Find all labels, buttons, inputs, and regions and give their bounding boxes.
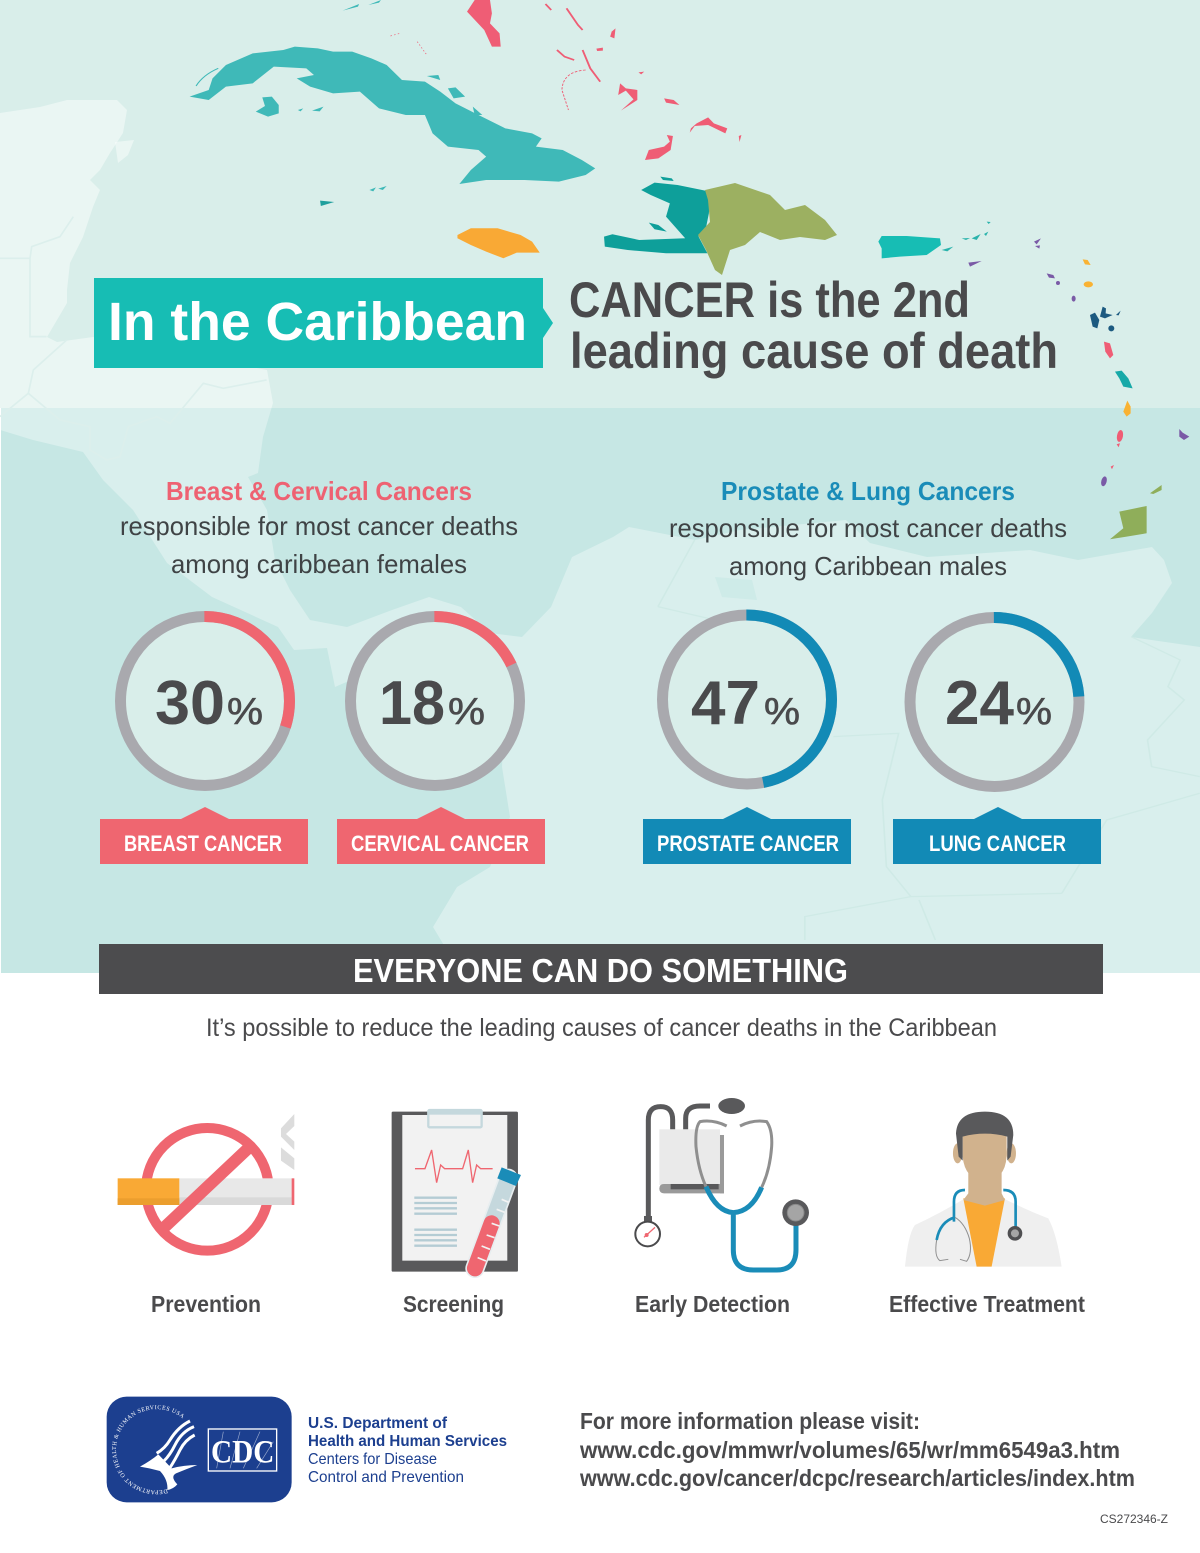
island: Puerto Rico (878, 236, 941, 258)
icon captions (151, 1291, 1085, 1317)
label: prostate cancer: PROSTATE CANCER (657, 831, 839, 856)
island: Bahamas (390, 0, 741, 160)
island: Virgin Islands (942, 222, 991, 251)
map background (0, 0, 1200, 973)
panel: male cancers heading: among Caribbean males (729, 551, 1007, 581)
agency name: Control and Prevention (308, 1469, 464, 1486)
more information links: For more information please visit: (580, 1408, 920, 1434)
icon captions: Screening (403, 1291, 504, 1317)
label: cervical cancer (337, 807, 545, 864)
logo: HHS and CDC: DEPARTMENT OF HEALTH & HUMAN SERVICES USA (112, 1405, 184, 1494)
donut: prostate cancer 47% (662, 615, 832, 784)
logo: HHS and CDC (106, 1396, 292, 1502)
subheading: It’s possible to reduce the leading causes of cancer deaths in the Caribbean (206, 1014, 997, 1042)
label: prostate cancer (643, 807, 851, 864)
map: eastern Caribbean islands (878, 222, 1189, 539)
island: Dominican Republic (698, 183, 837, 275)
label: cervical cancer: CERVICAL CANCER (351, 831, 529, 856)
more information links (579, 1408, 1135, 1491)
island: Haiti (604, 177, 710, 253)
section banner: EVERYONE CAN DO SOMETHING (353, 952, 848, 989)
more information links: www.cdc.gov/mmwr/volumes/65/wr/mm6549a3.htm (579, 1437, 1120, 1463)
island: Jamaica (457, 228, 540, 258)
logo: HHS and CDC: CDC (211, 1434, 274, 1470)
headline (569, 272, 1058, 379)
map: northern Caribbean islands (190, 0, 741, 258)
icon: doctor (905, 1112, 1062, 1267)
agency name: Health and Human Services (308, 1433, 507, 1450)
document code: CS272346-Z (1100, 1512, 1168, 1526)
panel: female cancers heading (120, 476, 518, 579)
label: breast cancer (100, 807, 308, 864)
title banner (94, 278, 553, 368)
label: lung cancer (893, 807, 1101, 864)
icon captions: Prevention (151, 1291, 261, 1317)
donut: breast cancer 30% (120, 616, 290, 786)
donut: prostate cancer 47%: 47 (691, 669, 760, 738)
icon captions: Effective Treatment (889, 1291, 1085, 1317)
icon: clipboard and test tube (392, 1109, 521, 1272)
donut: breast cancer 30%: 30 (155, 669, 225, 738)
title banner: In the Caribbean (108, 292, 527, 352)
icon: no smoking (118, 1114, 294, 1251)
panel: male cancers heading: Prostate & Lung Cancers (721, 476, 1015, 506)
panel: female cancers heading: responsible for most cancer deaths (120, 511, 518, 541)
donut: breast cancer 30%: % (227, 691, 263, 733)
label: lung cancer: LUNG CANCER (929, 831, 1066, 856)
panel: female cancers heading: among caribbean females (171, 549, 467, 579)
island: Isle of Youth and cays (196, 0, 482, 206)
panel: male cancers heading: responsible for most cancer deaths (669, 513, 1067, 543)
island: Cuba (190, 47, 595, 184)
icon: blood pressure cuff and stethoscope (635, 1098, 809, 1270)
icon captions: Early Detection (635, 1291, 790, 1317)
island: Trinidad (1110, 506, 1147, 539)
donut: lung cancer 24% (910, 618, 1079, 786)
donut: cervical cancer 18%: 18 (379, 669, 445, 738)
more information links: www.cdc.gov/cancer/dcpc/research/articles/index.htm (579, 1465, 1135, 1491)
agency name: U.S. Department of (308, 1415, 448, 1432)
panel: male cancers heading (669, 476, 1067, 581)
donut: lung cancer 24%: % (1016, 691, 1052, 733)
agency name (308, 1415, 507, 1486)
panel: female cancers heading: Breast & Cervical Cancers (166, 476, 472, 506)
label: breast cancer: BREAST CANCER (124, 831, 282, 856)
agency name: Centers for Disease (308, 1451, 437, 1468)
section banner (99, 944, 1103, 994)
donut: cervical cancer 18% (350, 616, 520, 786)
island: Lesser Antilles (968, 238, 1189, 539)
headline: CANCER is the 2nd (569, 272, 970, 328)
headline: leading cause of death (570, 323, 1058, 379)
donut: lung cancer 24%: 24 (945, 669, 1015, 738)
donut: prostate cancer 47%: % (764, 691, 800, 733)
donut: cervical cancer 18%: % (448, 691, 485, 733)
